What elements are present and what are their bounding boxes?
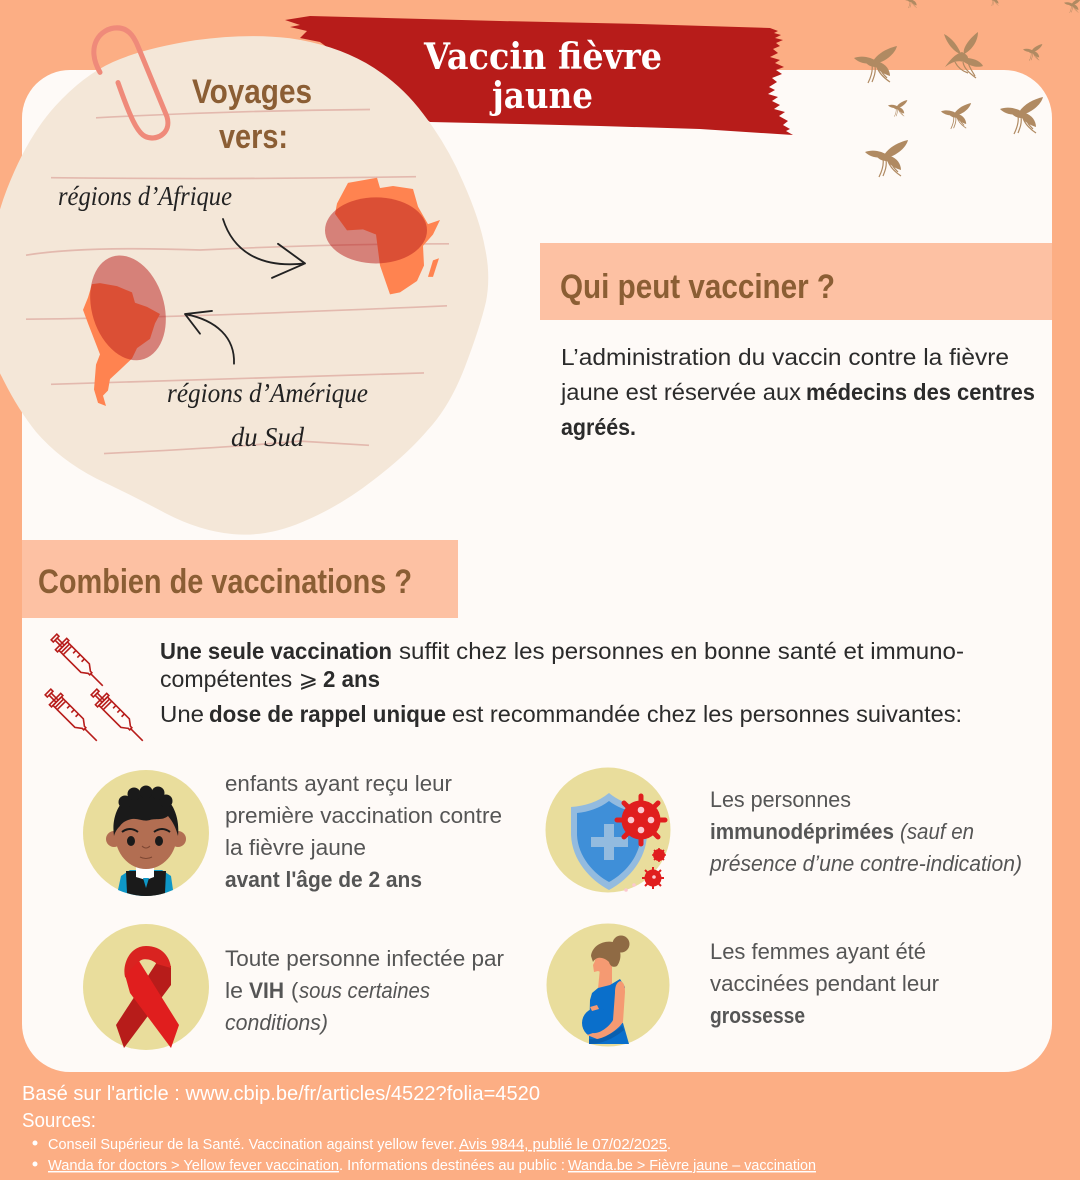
paragraph: jaune est réservée aux (560, 379, 802, 405)
heading band (540, 243, 1052, 320)
text: vaccinées pendant leur (710, 971, 939, 996)
mosquitoes (854, 0, 1080, 177)
paragraph: médecins des centres (806, 379, 1035, 405)
title text: jaune (489, 75, 593, 117)
label: Amérique du Sud: régions d’Amérique (167, 378, 368, 408)
text: Les personnes (710, 787, 851, 812)
map: Africa (325, 178, 440, 294)
text: présence d’une contre-indication) (709, 851, 1022, 876)
footer: sources: Avis 9844, publié le 07/02/2025 (459, 1137, 667, 1153)
intro text: dose de rappel unique (209, 701, 446, 727)
label: Amérique du Sud (167, 378, 368, 452)
text: la fièvre jaune (225, 835, 366, 860)
heading: Combien de vaccinations ? (38, 563, 412, 601)
heading: voyages vers (192, 73, 312, 156)
item: HIV (83, 924, 504, 1050)
intro text: compétentes ⩾ (160, 666, 318, 692)
text: première vaccination contre (225, 803, 502, 828)
paper blob (0, 36, 488, 535)
intro text: Une seule vaccination (160, 638, 392, 664)
text: conditions) (225, 1010, 328, 1035)
footer: sources: Wanda.be > Fièvre jaune – vaccination (568, 1158, 816, 1174)
footer: sources: Basé sur l'article : www.cbip.be/fr/articles/4522?folia=4520 (22, 1083, 540, 1105)
text: enfants ayant reçu leur (225, 771, 452, 796)
intro text: suffit chez les personnes en bonne santé et immuno- (399, 638, 964, 664)
text: grossesse (710, 1003, 805, 1028)
heading: voyages vers: Voyages (192, 73, 312, 111)
footer: sources: Wanda for doctors > Yellow fever vaccination (48, 1158, 339, 1174)
item: children (83, 770, 502, 896)
text (225, 946, 504, 1035)
intro text: est recommandée chez les personnes suivantes: (452, 701, 962, 727)
text: ( (291, 978, 299, 1003)
intro text: Une (160, 701, 204, 727)
paragraph (560, 344, 1035, 440)
paperclip (94, 28, 168, 138)
icon: red ribbon (83, 924, 209, 1050)
footer: sources (22, 1083, 816, 1174)
text: le (225, 978, 243, 1003)
heading: voyages vers: vers: (219, 118, 288, 156)
text: sous certaines (299, 978, 430, 1003)
text: avant l'âge de 2 ans (225, 867, 422, 892)
panel: travel note (0, 28, 488, 535)
intro text: 2 ans (323, 666, 380, 692)
heading band (22, 540, 458, 618)
text (709, 787, 1022, 876)
icon: syringes (42, 631, 148, 746)
text: VIH (249, 978, 284, 1003)
intro text (160, 638, 964, 727)
text: immunodéprimées (710, 819, 894, 844)
arrow to South America (185, 311, 234, 364)
arrow to Africa (223, 219, 305, 278)
paper lines (26, 110, 449, 454)
footer: sources: . Informations destinées au public : (339, 1158, 565, 1174)
title banner (285, 16, 793, 135)
icon: boy (83, 770, 209, 896)
heading: Qui peut vacciner ? (560, 268, 835, 306)
text: (sauf en (900, 819, 974, 844)
large mosquito (944, 32, 983, 78)
label: Amérique du Sud: du Sud (231, 422, 304, 452)
icon: shield and virus (546, 768, 670, 892)
item: immunocompromised (546, 768, 1022, 892)
banner brush shape (285, 16, 793, 135)
text (225, 771, 502, 892)
footer: sources: Conseil Supérieur de la Santé. Vaccination against yellow fever. (48, 1137, 457, 1153)
paragraph: L’administration du vaccin contre la fièvre (561, 344, 1009, 370)
icon: pregnant woman (546, 924, 670, 1046)
footer: sources: . (667, 1137, 671, 1153)
panel: qui peut vacciner (540, 243, 1052, 440)
label: Afrique: régions d’Afrique (58, 181, 232, 211)
text: Les femmes ayant été (710, 939, 926, 964)
paragraph: agréés. (561, 414, 636, 440)
panel: combien de vaccinations (22, 540, 1022, 1050)
title text (423, 36, 662, 117)
footer: sources: Sources: (22, 1110, 96, 1132)
item: pregnant women (546, 924, 939, 1046)
title text: Vaccin fièvre (423, 36, 662, 78)
text: Toute personne infectée par (225, 946, 504, 971)
text (710, 939, 939, 1028)
map: South America (78, 245, 178, 406)
